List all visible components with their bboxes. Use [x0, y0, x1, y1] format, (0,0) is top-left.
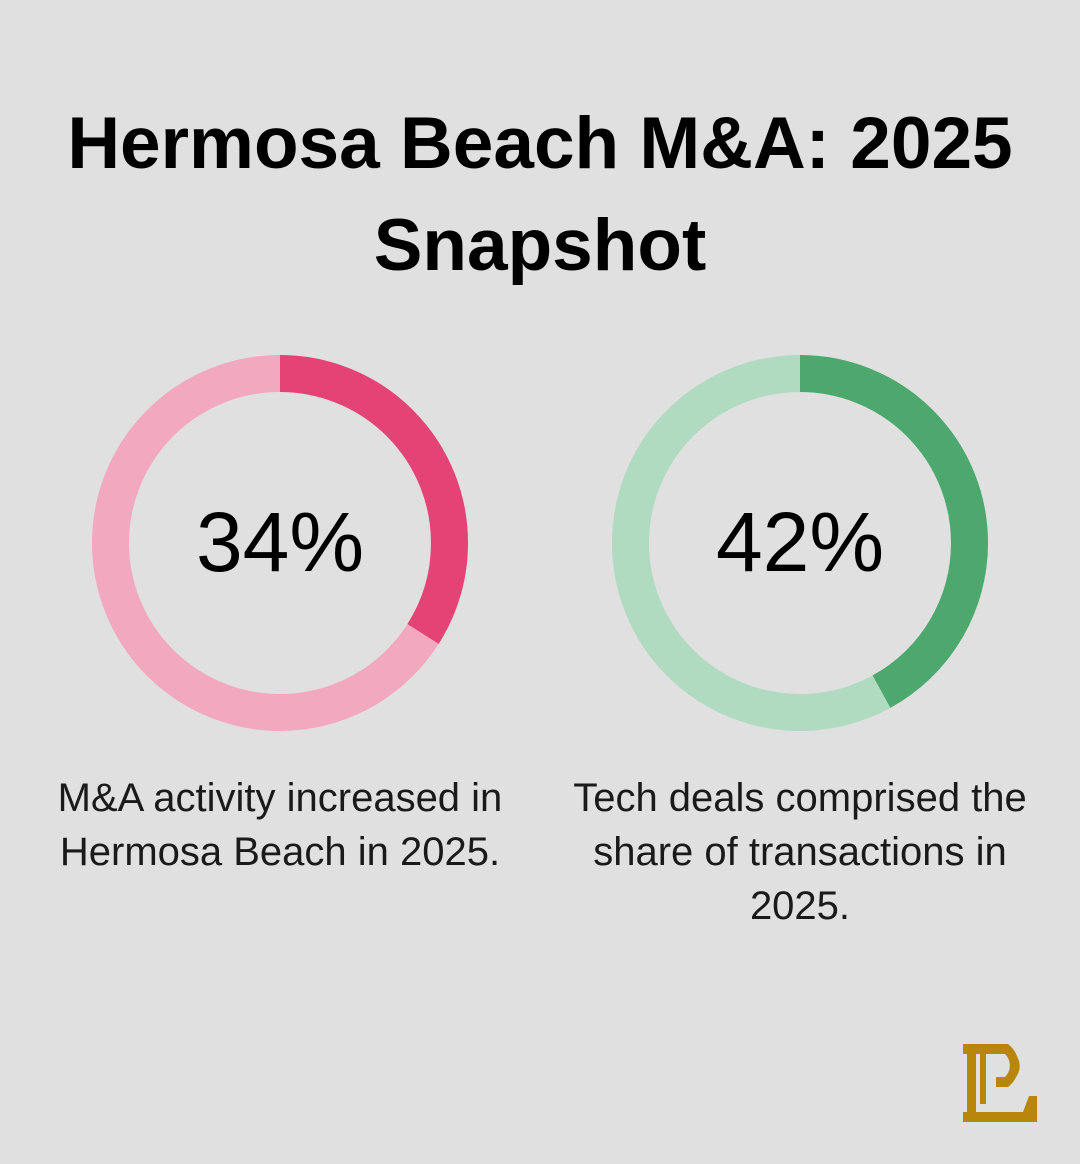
caption left: M&A activity increased in Hermosa Beach in 2025. — [58, 776, 502, 874]
chart: donut 34%: 34% — [196, 495, 364, 589]
title: Snapshot — [374, 205, 706, 286]
icon: logo — [963, 1044, 1037, 1122]
chart: donut 42% — [612, 355, 988, 731]
chart: donut 34% — [92, 355, 468, 731]
title — [67, 103, 1013, 286]
caption right: Tech deals comprised the share of transactions in 2025. — [573, 776, 1027, 928]
title: Hermosa Beach M&A: 2025 — [67, 103, 1013, 184]
chart: donut 42%: 42% — [716, 495, 884, 589]
